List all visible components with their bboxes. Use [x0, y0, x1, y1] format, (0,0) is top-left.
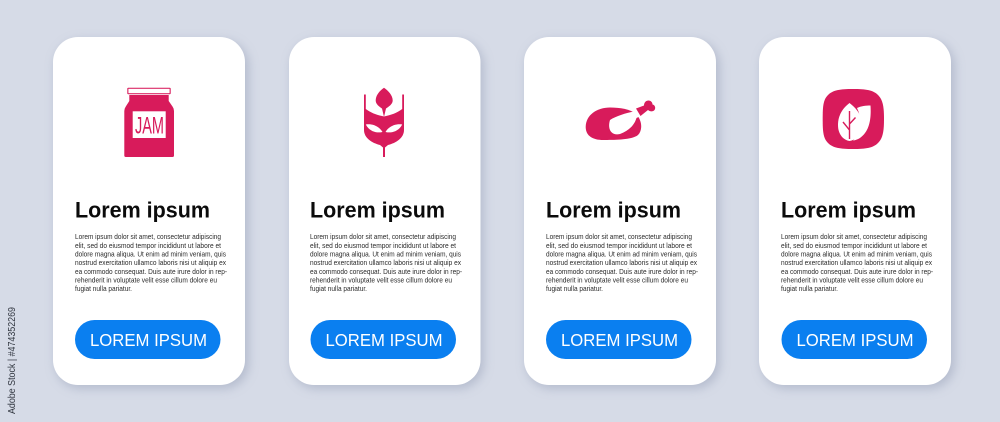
heading: Lorem ipsum — [546, 198, 681, 222]
body text: ea commodo consequat. Duis aute irure dolor in rep- — [310, 267, 463, 276]
body text: rehenderit in voluptate velit esse cillum dolore eu — [75, 276, 217, 284]
icon: roast chicken — [586, 100, 655, 140]
icon: jam jar: JAM — [135, 112, 164, 140]
button: LOREM IPSUM — [326, 330, 442, 350]
body text: fugiat nulla pariatur. — [781, 284, 838, 293]
body text: ea commodo consequat. Duis aute irure dolor in rep- — [781, 267, 934, 276]
body text: fugiat nulla pariatur. — [310, 284, 367, 293]
icon: leaves — [823, 89, 884, 149]
heading: Lorem ipsum — [310, 198, 445, 222]
body text: Lorem ipsum dolor sit amet, consectetur adipiscing — [75, 232, 221, 241]
body text: elit, sed do eiusmod tempor incididunt ut labore et — [310, 241, 456, 250]
body text: dolore magna aliqua. Ut enim ad minim veniam, quis — [75, 250, 226, 258]
body text: rehenderit in voluptate velit esse cillum dolore eu — [781, 276, 923, 284]
panel: jam card — [53, 37, 249, 389]
panel: chicken card — [524, 37, 720, 389]
body text: fugiat nulla pariatur. — [75, 284, 132, 293]
body text: nostrud exercitation ullamco laboris nisi ut aliquip ex — [310, 258, 461, 267]
body text: elit, sed do eiusmod tempor incididunt ut labore et — [781, 241, 927, 250]
body text: nostrud exercitation ullamco laboris nisi ut aliquip ex — [546, 258, 697, 267]
panel: wheat card — [289, 37, 484, 389]
body text: Lorem ipsum dolor sit amet, consectetur adipiscing — [781, 232, 927, 241]
body text: fugiat nulla pariatur. — [546, 284, 603, 293]
button — [782, 320, 927, 359]
button: LOREM IPSUM — [796, 330, 914, 350]
body text — [75, 232, 228, 293]
body text: rehenderit in voluptate velit esse cillum dolore eu — [546, 276, 688, 284]
body text: Lorem ipsum dolor sit amet, consectetur adipiscing — [310, 232, 456, 241]
heading: Lorem ipsum — [75, 198, 210, 222]
icon: wheat — [364, 88, 404, 157]
body text: nostrud exercitation ullamco laboris nisi ut aliquip ex — [75, 258, 226, 267]
body text: dolore magna aliqua. Ut enim ad minim veniam, quis — [310, 250, 461, 258]
button — [546, 320, 692, 359]
body text: dolore magna aliqua. Ut enim ad minim veniam, quis — [781, 250, 932, 258]
body text — [310, 232, 463, 293]
body text: elit, sed do eiusmod tempor incididunt ut labore et — [546, 241, 692, 250]
body text: nostrud exercitation ullamco laboris nisi ut aliquip ex — [781, 258, 932, 267]
icon: jam jar — [124, 88, 174, 157]
body text: ea commodo consequat. Duis aute irure dolor in rep- — [546, 267, 699, 276]
button: LOREM IPSUM — [90, 330, 207, 350]
body text: dolore magna aliqua. Ut enim ad minim veniam, quis — [546, 250, 697, 258]
panel: leaf card — [759, 37, 955, 389]
heading: Lorem ipsum — [781, 198, 916, 222]
body text: rehenderit in voluptate velit esse cillum dolore eu — [310, 276, 452, 284]
button — [310, 320, 456, 359]
body text: Lorem ipsum dolor sit amet, consectetur adipiscing — [546, 232, 692, 241]
body text: elit, sed do eiusmod tempor incididunt ut labore et — [75, 241, 221, 250]
button — [75, 320, 220, 359]
button: LOREM IPSUM — [561, 330, 678, 350]
stock id caption: Adobe Stock | #474352269 — [7, 307, 18, 414]
body text — [546, 232, 699, 293]
body text: ea commodo consequat. Duis aute irure dolor in rep- — [75, 267, 228, 276]
body text — [781, 232, 934, 293]
